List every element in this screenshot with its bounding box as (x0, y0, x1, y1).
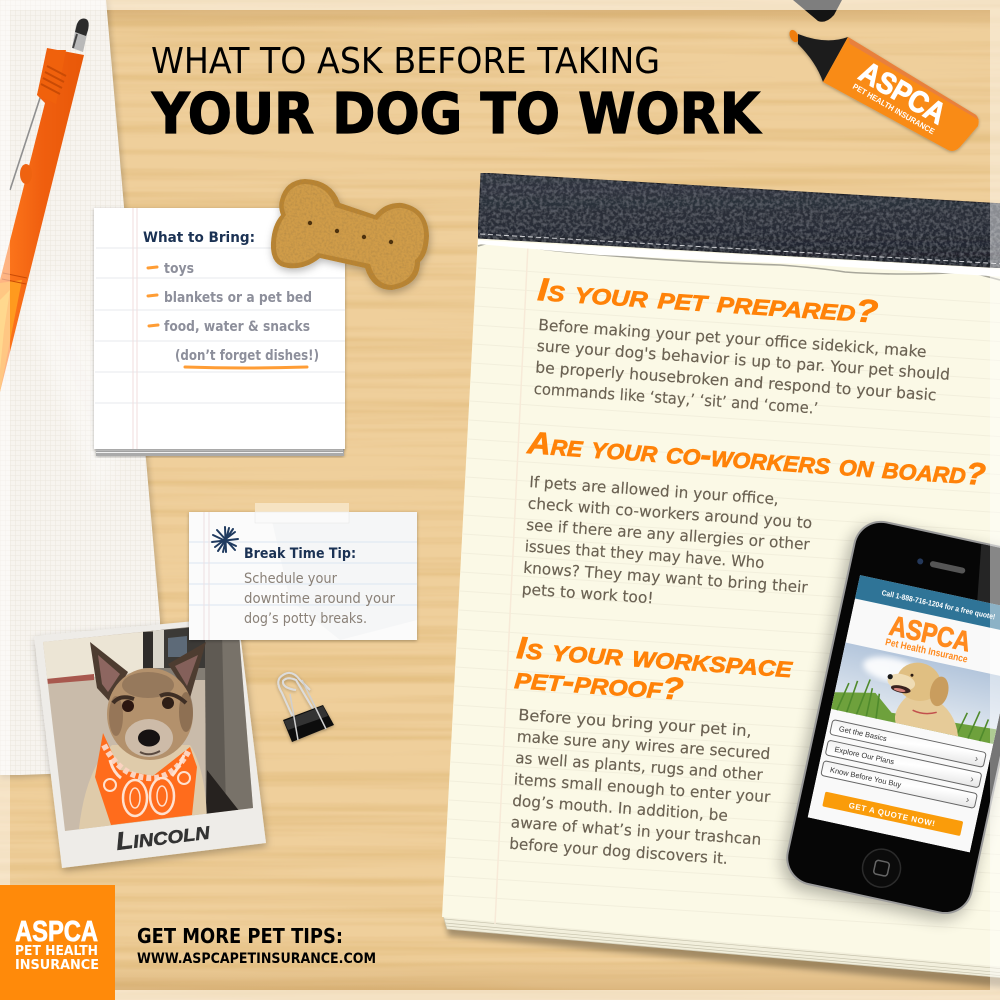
polaroid photo of Lincoln (30, 610, 270, 868)
break time tip note (189, 503, 417, 640)
paragraph 3: before your dog discovers it. (509, 835, 728, 868)
paragraph 1 (533, 316, 952, 427)
footer call to action: WWW.ASPCAPETINSURANCE.COM (137, 951, 376, 967)
marker logo: PET HEALTH INSURANCE (851, 82, 937, 137)
heading 3 (514, 630, 795, 707)
paragraph 1: commands like ‘stay,’ ‘sit’ and ‘come.’ (533, 380, 819, 418)
menu buttons: › (974, 754, 979, 765)
screen logo (885, 616, 968, 662)
section 3: workspace (509, 630, 795, 871)
icon: scribble star (212, 527, 238, 552)
paragraph 3: items small enough to enter your (513, 770, 771, 806)
highlighter marker (788, 0, 979, 151)
title (151, 41, 762, 147)
heading 2: Are your co-workers on board? (525, 425, 987, 492)
tip body (244, 571, 395, 627)
paragraph 3: aware of what’s in your trashcan (510, 813, 762, 849)
paragraph 2: issues that they may have. Who (524, 537, 765, 572)
paragraph 3: dog’s mouth. In addition, be (512, 792, 728, 825)
heading 3: Is your workspace (516, 630, 795, 684)
tape (255, 503, 349, 523)
phone screen (808, 575, 1000, 852)
dog (78, 642, 207, 838)
screen logo: Pet Health Insurance (884, 637, 969, 666)
title: YOUR DOG TO WORK (151, 82, 762, 147)
orange logo box: ASPCA (15, 916, 98, 948)
orange logo box (0, 885, 115, 1000)
paragraph 2: If pets are allowed in your office, (529, 473, 779, 508)
footer call to action (137, 924, 376, 967)
tip body: downtime around your (244, 591, 395, 607)
smartphone (777, 515, 1000, 925)
speaker and camera (917, 558, 966, 574)
polaroid caption: Lincoln (114, 817, 212, 856)
checklist: food, water & snacks (164, 319, 310, 335)
torn paper edge (478, 242, 1000, 280)
tip body: Schedule your (244, 571, 337, 587)
menu buttons: Explore Our Plans (834, 745, 895, 766)
paragraph 2: pets to work too! (521, 580, 654, 607)
footer call to action: GET MORE PET TIPS: (137, 924, 343, 948)
orange logo box: PET HEALTH (15, 943, 98, 959)
heading 3: pet-proof? (514, 660, 685, 707)
binder clip (278, 673, 334, 742)
paragraph 3: as well as plants, rugs and other (515, 749, 764, 784)
note: what to bring (94, 208, 345, 456)
checklist: blankets or a pet bed (164, 290, 312, 306)
leather binding (478, 173, 1000, 268)
menu buttons: Know Before You Buy (829, 765, 902, 789)
quote button: GET A QUOTE NOW! (848, 801, 936, 828)
checklist: toys (164, 261, 194, 277)
section 1: is your pet prepared (533, 271, 952, 427)
dog biscuit (271, 179, 429, 290)
menu buttons: Get the Basics (838, 724, 888, 743)
tip heading: Break Time Tip: (244, 546, 356, 562)
top bar (855, 575, 1000, 634)
bandana (95, 733, 197, 825)
screen logo: ASPCA (887, 610, 974, 657)
home button (859, 846, 904, 891)
white paper towel (0, 0, 162, 778)
paragraph 1: be properly housebroken and respond to your basic (535, 358, 937, 404)
menu buttons: › (969, 774, 975, 786)
menu buttons: › (965, 795, 970, 806)
ruled lines (444, 268, 1000, 931)
title: WHAT TO ASK BEFORE TAKING (151, 41, 660, 82)
orange logo box: INSURANCE (15, 957, 99, 973)
heading 1: Is your pet prepared? (537, 271, 879, 330)
section 2: co-workers (521, 425, 987, 618)
golden retriever photo (831, 642, 1000, 744)
notepad (442, 173, 1000, 988)
paragraph 3 (509, 706, 776, 871)
checklist (148, 261, 319, 368)
note heading: What to Bring: (143, 230, 255, 246)
paragraph 2: check with co-workers around you to (527, 494, 813, 532)
paragraph 1: Before making your pet your office sidekick, make (538, 316, 927, 361)
dog photo (43, 627, 253, 831)
marker logo: ASPCA (854, 55, 951, 131)
paragraph 3: make sure any wires are secured (516, 727, 771, 763)
paragraph 2 (521, 473, 815, 618)
checklist: (don’t forget dishes!) (175, 348, 319, 364)
quote button (822, 792, 963, 836)
paragraph 3: Before you bring your pet in, (518, 706, 752, 740)
menu buttons (821, 720, 986, 808)
paragraph 1: sure your dog's behavior is up to par. Your pet should (536, 337, 951, 384)
paragraph 2: knows? They may want to bring their (523, 559, 809, 597)
tip body: dog’s potty breaks. (244, 611, 367, 627)
orange pen (0, 19, 89, 392)
paragraph 2: see if there are any allergies or other (526, 516, 811, 554)
